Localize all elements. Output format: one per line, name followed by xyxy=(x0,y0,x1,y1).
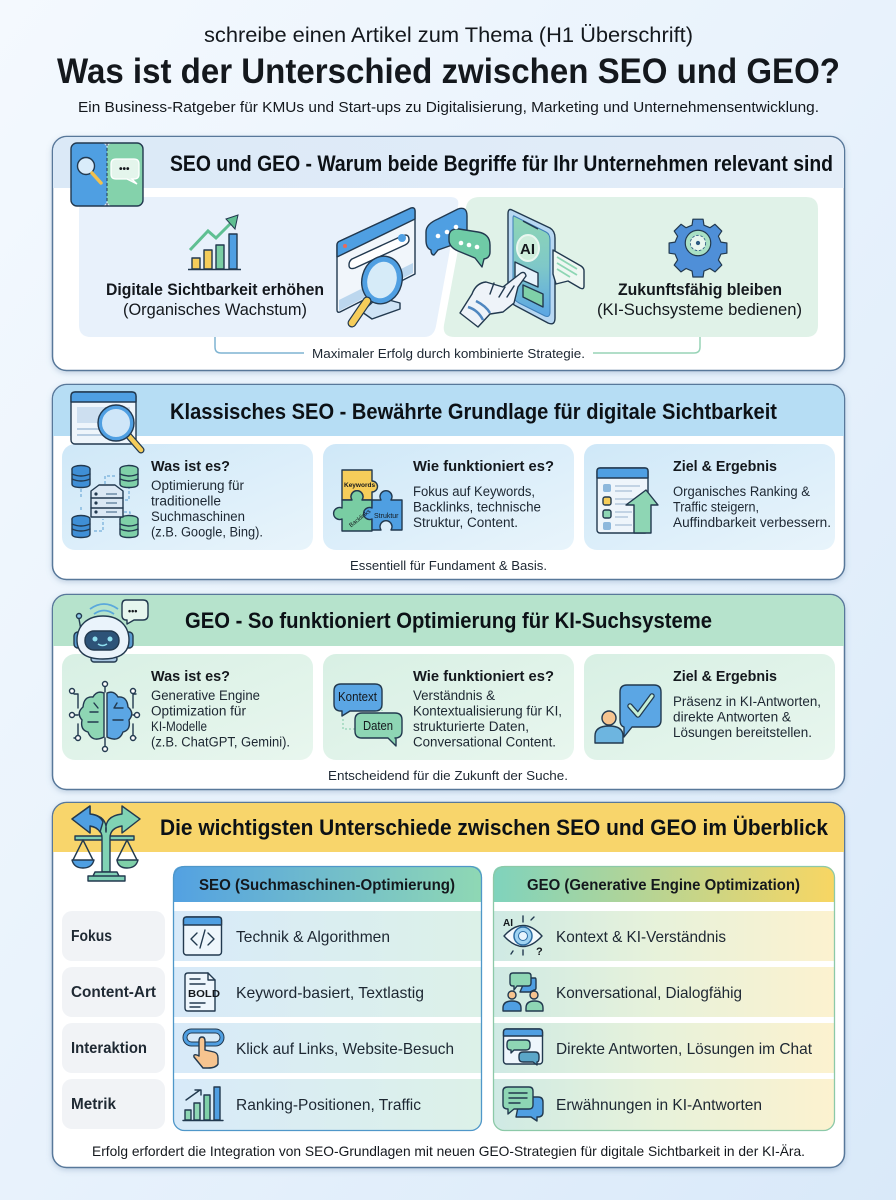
card: Was ist es: (z.B. Google, Bing). xyxy=(151,524,263,540)
card: Ziel und Ergebnis: Ziel & Ergebnis xyxy=(673,458,777,475)
card: Ziel und Ergebnis: Lösungen bereitstellen. xyxy=(673,725,812,740)
card: Was ist es: Generative Engine xyxy=(151,688,260,703)
icon: server and databases xyxy=(72,466,138,538)
card: Wie funktioniert es: Backlinks, technische xyxy=(413,500,541,514)
heading: panel 2: Klassisches SEO - Bewährte Grundlage für digitale Sichtbarkeit xyxy=(170,399,778,424)
icon: AI eye: AI xyxy=(503,918,513,929)
card: Wie funktioniert es: Conversational Content. xyxy=(413,734,556,750)
icon: browser with magnifier xyxy=(337,208,415,323)
icon: brain network xyxy=(70,682,140,752)
column: GEO: Erwähnungen in KI-Antworten xyxy=(556,1097,762,1114)
icon: puzzle xyxy=(334,470,402,531)
column: SEO: SEO (Suchmaschinen-Optimierung) xyxy=(199,877,455,894)
icon: chat window xyxy=(504,1029,542,1065)
row labels: Fokus xyxy=(71,928,112,945)
card: Wie funktioniert es: Struktur, Content. xyxy=(413,515,518,530)
text: digital visibility: (Organisches Wachstum) xyxy=(123,300,307,319)
page title block: Ein Business-Ratgeber für KMUs und Start-ups zu Digitalisierung, Marketing und Unternehmensentwicklung. xyxy=(78,99,819,116)
icon: puzzle: Struktur xyxy=(374,513,399,520)
icon: ranking chart xyxy=(183,1087,223,1120)
icon: document bold xyxy=(185,973,220,1011)
row labels: Interaktion xyxy=(71,1040,147,1057)
card: Ziel und Ergebnis: Ziel & Ergebnis xyxy=(673,668,777,685)
card: Ziel und Ergebnis xyxy=(584,444,835,550)
card: Wie funktioniert es: Kontextualisierung für KI, xyxy=(413,704,562,718)
card: Was ist es: Optimierung für xyxy=(151,478,244,493)
column: GEO: Kontext & KI-Verständnis xyxy=(556,929,726,946)
icon: growth bar chart xyxy=(188,215,241,270)
column: SEO: Technik & Algorithmen xyxy=(236,929,390,946)
column: SEO xyxy=(173,866,482,1130)
footer note: panel 1: Maximaler Erfolg durch kombinierte Strategie. xyxy=(312,346,585,361)
card: Ziel und Ergebnis xyxy=(584,654,835,760)
text: future-proof: (KI-Suchsysteme bedienen) xyxy=(597,300,802,319)
text: digital visibility xyxy=(106,280,324,319)
card: Was ist es: (z.B. ChatGPT, Gemini). xyxy=(151,734,290,750)
icon: puzzle: Backlinks xyxy=(349,509,372,529)
column: GEO: Direkte Antworten, Lösungen im Chat xyxy=(556,1041,813,1058)
icon: AI eye: ? xyxy=(536,946,543,958)
panel: GEO xyxy=(52,594,844,790)
page title block: Was ist der Unterschied zwischen SEO und GEO? xyxy=(57,52,840,91)
card: Wie funktioniert es xyxy=(323,444,574,550)
icon: link with hand xyxy=(185,1031,222,1068)
icon: smartphone with AI and robot hand: AI xyxy=(520,241,535,258)
text: future-proof xyxy=(597,280,802,319)
card: Was ist es: Was ist es? xyxy=(151,458,230,475)
icon: Kontext and Daten bubbles xyxy=(334,684,402,746)
card: Wie funktioniert es: strukturierte Daten, xyxy=(413,719,529,734)
icon: Kontext and Daten bubbles: Daten xyxy=(363,719,393,733)
right future-proof area xyxy=(444,197,818,337)
icon: robot: ••• xyxy=(128,606,137,616)
row labels: Content-Art xyxy=(71,984,156,1001)
card: Was ist es: Suchmaschinen xyxy=(151,509,245,524)
card: Wie funktioniert es: Verständnis & xyxy=(413,688,495,703)
card: Was ist es xyxy=(62,654,313,760)
row labels xyxy=(62,911,165,1129)
icon: split search and chat: ••• xyxy=(119,164,130,175)
icon: person with check bubble xyxy=(595,685,661,743)
icon: code window xyxy=(184,917,222,955)
icon: smartphone with AI and robot hand xyxy=(460,210,584,327)
card: Ziel und Ergebnis: Auffindbarkeit verbessern. xyxy=(673,515,831,530)
card: Was ist es: Optimization für xyxy=(151,704,246,718)
card: Wie funktioniert es: Fokus auf Keywords, xyxy=(413,484,535,499)
card: Ziel und Ergebnis: Traffic steigern, xyxy=(673,500,759,514)
card: Ziel und Ergebnis: Präsenz in KI-Antworten, xyxy=(673,694,821,709)
footer note: panel 2: Essentiell für Fundament & Basis. xyxy=(350,558,547,573)
panel: Klassisches SEO xyxy=(52,384,844,580)
left organic growth area xyxy=(79,197,458,337)
footer note: panel 4: Erfolg erfordert die Integration von SEO-Grundlagen mit neuen GEO-Strategien für digitale Sichtbarkeit in der KI-Ära. xyxy=(92,1143,805,1159)
panel: Unterschiede im Überblick xyxy=(52,802,844,1168)
icon: search window xyxy=(71,392,141,450)
icon: mention bubbles xyxy=(503,1087,543,1121)
column: GEO: Konversational, Dialogfähig xyxy=(556,985,742,1002)
card: Was ist es: traditionelle xyxy=(151,494,221,508)
icon: chat bubbles xyxy=(426,208,490,267)
footer note: panel 3: Entscheidend für die Zukunft der Suche. xyxy=(328,768,568,783)
page title block: schreibe einen Artikel zum Thema (H1 Überschrift) xyxy=(204,24,693,47)
icon: robot xyxy=(74,600,148,662)
card: Ziel und Ergebnis: Organisches Ranking & xyxy=(673,484,810,499)
card: Wie funktioniert es xyxy=(323,654,574,760)
icon: conversation people xyxy=(503,973,543,1011)
icon: ranking list with arrow xyxy=(597,468,658,533)
icon: AI eye xyxy=(503,916,543,958)
card: Wie funktioniert es: Wie funktioniert es? xyxy=(413,458,554,475)
icon: split search and chat xyxy=(71,143,143,206)
column: SEO: Keyword-basiert, Textlastig xyxy=(236,985,424,1002)
column: SEO: Klick auf Links, Website-Besuch xyxy=(236,1041,454,1058)
icon: Kontext and Daten bubbles: Kontext xyxy=(338,690,377,704)
column: GEO xyxy=(493,866,834,1130)
bracket connector xyxy=(215,337,700,353)
page title block xyxy=(57,24,840,116)
column: SEO: Ranking-Positionen, Traffic xyxy=(236,1097,421,1114)
card: Was ist es xyxy=(62,444,313,550)
card: Ziel und Ergebnis: direkte Antworten & xyxy=(673,710,791,724)
heading: panel 3: GEO - So funktioniert Optimierung für KI-Suchsysteme xyxy=(185,608,712,633)
icon: document bold: BOLD xyxy=(188,989,220,1000)
text: digital visibility: Digitale Sichtbarkeit erhöhen xyxy=(106,280,324,299)
icon: puzzle: Keywords xyxy=(344,482,375,489)
card: Was ist es: Was ist es? xyxy=(151,668,230,685)
icon: gear xyxy=(669,219,727,277)
row labels: Metrik xyxy=(71,1096,116,1113)
card: Was ist es: KI-Modelle xyxy=(151,719,207,734)
icon: scales with arrows xyxy=(72,806,140,881)
text: future-proof: Zukunftsfähig bleiben xyxy=(618,280,782,299)
card: Wie funktioniert es: Wie funktioniert es? xyxy=(413,668,554,685)
heading: panel 4: Die wichtigsten Unterschiede zwischen SEO und GEO im Überblick xyxy=(160,815,829,840)
column: GEO: GEO (Generative Engine Optimization) xyxy=(527,877,800,894)
panel: SEO und GEO relevance xyxy=(52,136,844,370)
